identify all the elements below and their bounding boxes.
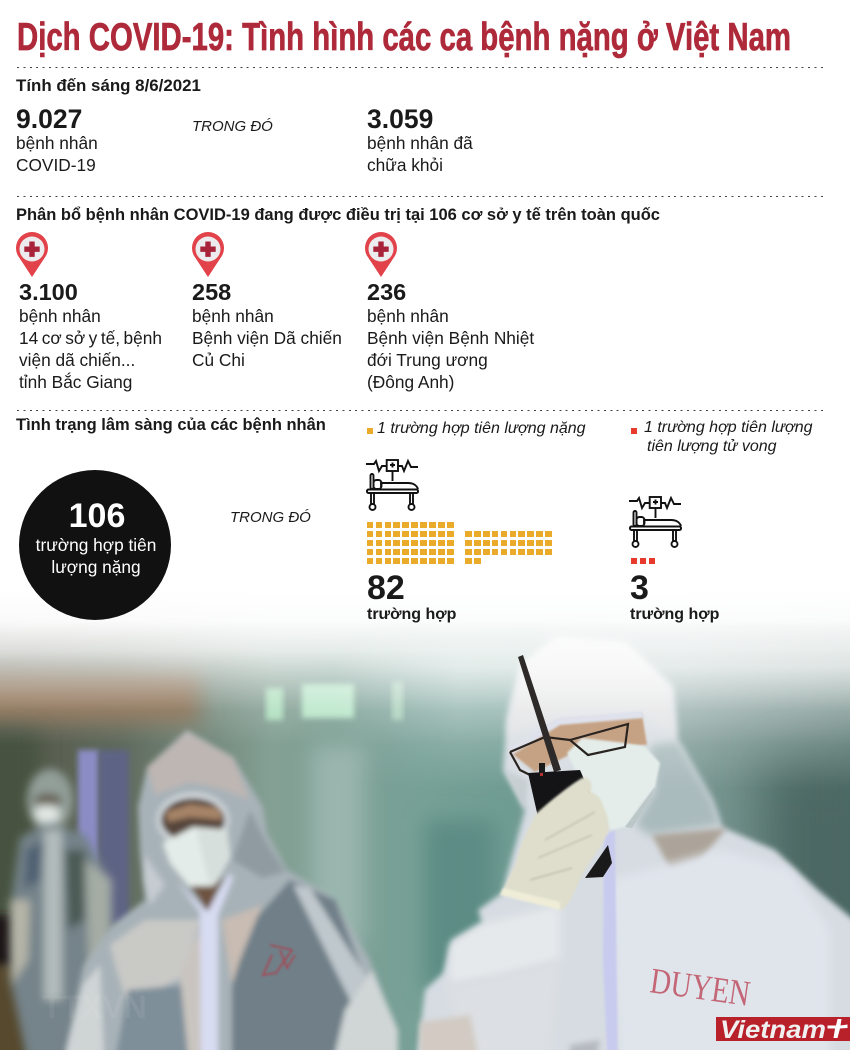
stat: 3 cases: trường hợp xyxy=(630,606,719,623)
background photo: medical workers in protective suits xyxy=(0,624,850,1050)
label: of which: TRONG ĐÓ xyxy=(192,118,273,135)
chart: 3 fatal-prognosis cases xyxy=(629,496,719,623)
waffle chart: 3 squares xyxy=(631,558,655,564)
callout: 106 severe cases: trường hợp tiên xyxy=(36,535,156,555)
location: Đông Anh: 236 xyxy=(367,279,406,305)
location: Củ Chi: bệnh nhân xyxy=(192,306,274,326)
heading: distribution: Phân bổ bệnh nhân COVID-19 đang được điều trị tại 106 cơ sở y tế trên toàn quốc xyxy=(16,206,660,224)
callout: 106 severe cases xyxy=(19,470,171,620)
legend: fatal prognosis: tiên lượng tử vong xyxy=(647,438,777,455)
location: Bắc Giang: 14 cơ sở y tế, bệnh xyxy=(19,328,162,348)
location: Đông Anh xyxy=(365,232,534,392)
stat: total patients: COVID-19 xyxy=(16,155,96,175)
front-left worker xyxy=(60,730,398,1050)
stat: recovered xyxy=(367,104,473,175)
icon: hospital bed xyxy=(366,458,419,511)
gloved hand xyxy=(500,778,609,910)
location: Củ Chi xyxy=(192,232,342,370)
location: Củ Chi: 258 xyxy=(192,279,231,305)
logo: Vietnam+ xyxy=(716,1017,850,1041)
stat: 3 cases: 3 xyxy=(630,569,649,607)
callout: 106 severe cases: 106 xyxy=(69,497,125,535)
location: Bắc Giang xyxy=(16,232,162,392)
backdrop wall xyxy=(0,590,850,1050)
legend: fatal prognosis: 1 trường hợp tiên lượng xyxy=(644,419,812,436)
location: Bắc Giang: viện dã chiến... xyxy=(19,350,135,370)
heading: date: Tính đến sáng 8/6/2021 xyxy=(16,76,201,95)
location: Đông Anh: bệnh nhân xyxy=(367,306,449,326)
panel: patient distribution xyxy=(16,206,660,392)
panel: overall figures xyxy=(16,76,473,175)
icon: map pin xyxy=(365,232,397,277)
location: Đông Anh: đới Trung ương xyxy=(367,350,488,370)
icon: hospital bed xyxy=(629,496,682,548)
faint photo agency watermark: TTXVN xyxy=(42,989,147,1025)
chart: 82 severe cases xyxy=(366,458,552,623)
waffle chart: 32 squares xyxy=(465,531,552,564)
label: of which: TRONG ĐÓ xyxy=(230,509,311,526)
legend: fatal prognosis xyxy=(631,419,812,455)
stat: recovered: bệnh nhân đã xyxy=(367,133,473,153)
location: Bắc Giang: 3.100 xyxy=(19,279,78,305)
stat: 82 cases xyxy=(367,569,456,623)
red marking on left worker's suit xyxy=(263,945,295,975)
location: Đông Anh: (Đông Anh) xyxy=(367,372,454,392)
location: Bắc Giang: bệnh nhân xyxy=(19,306,101,326)
location: Đông Anh: Bệnh viện Bệnh Nhiệt xyxy=(367,328,534,348)
icon: map pin xyxy=(16,232,48,277)
stat: 3 cases xyxy=(630,569,719,623)
stat: recovered: chữa khỏi xyxy=(367,155,443,175)
waffle chart: 50 squares xyxy=(367,522,454,564)
location: Bắc Giang: tỉnh Bắc Giang xyxy=(19,372,132,392)
legend: severe prognosis: 1 trường hợp tiên lượng nặng xyxy=(377,420,586,437)
stat: total patients: 9.027 xyxy=(16,104,82,134)
stat: 82 cases: trường hợp xyxy=(367,606,456,623)
location: Củ Chi: Bệnh viện Dã chiến xyxy=(192,328,342,348)
logo: Vietnam+: Vietnam xyxy=(720,1016,826,1044)
face, glasses and mask xyxy=(510,711,660,830)
callout: 106 severe cases: lượng nặng xyxy=(51,557,141,577)
location: Củ Chi: Củ Chi xyxy=(192,350,245,370)
icon: map pin xyxy=(192,232,224,277)
front-right worker suit xyxy=(415,637,850,1050)
stat: total patients: bệnh nhân xyxy=(16,133,98,153)
stat: recovered: 3.059 xyxy=(367,104,433,134)
heading: clinical status: Tình trạng lâm sàng của các bệnh nhân xyxy=(16,416,326,434)
stat: total patients xyxy=(16,104,98,175)
stat: 82 cases: 82 xyxy=(367,569,405,607)
white fade from page into photo xyxy=(0,590,850,790)
background figure in protective suit xyxy=(10,769,115,1050)
walkie-talkie radio xyxy=(518,655,612,878)
handwritten name on right worker's suit: DUYEN xyxy=(648,960,752,1014)
